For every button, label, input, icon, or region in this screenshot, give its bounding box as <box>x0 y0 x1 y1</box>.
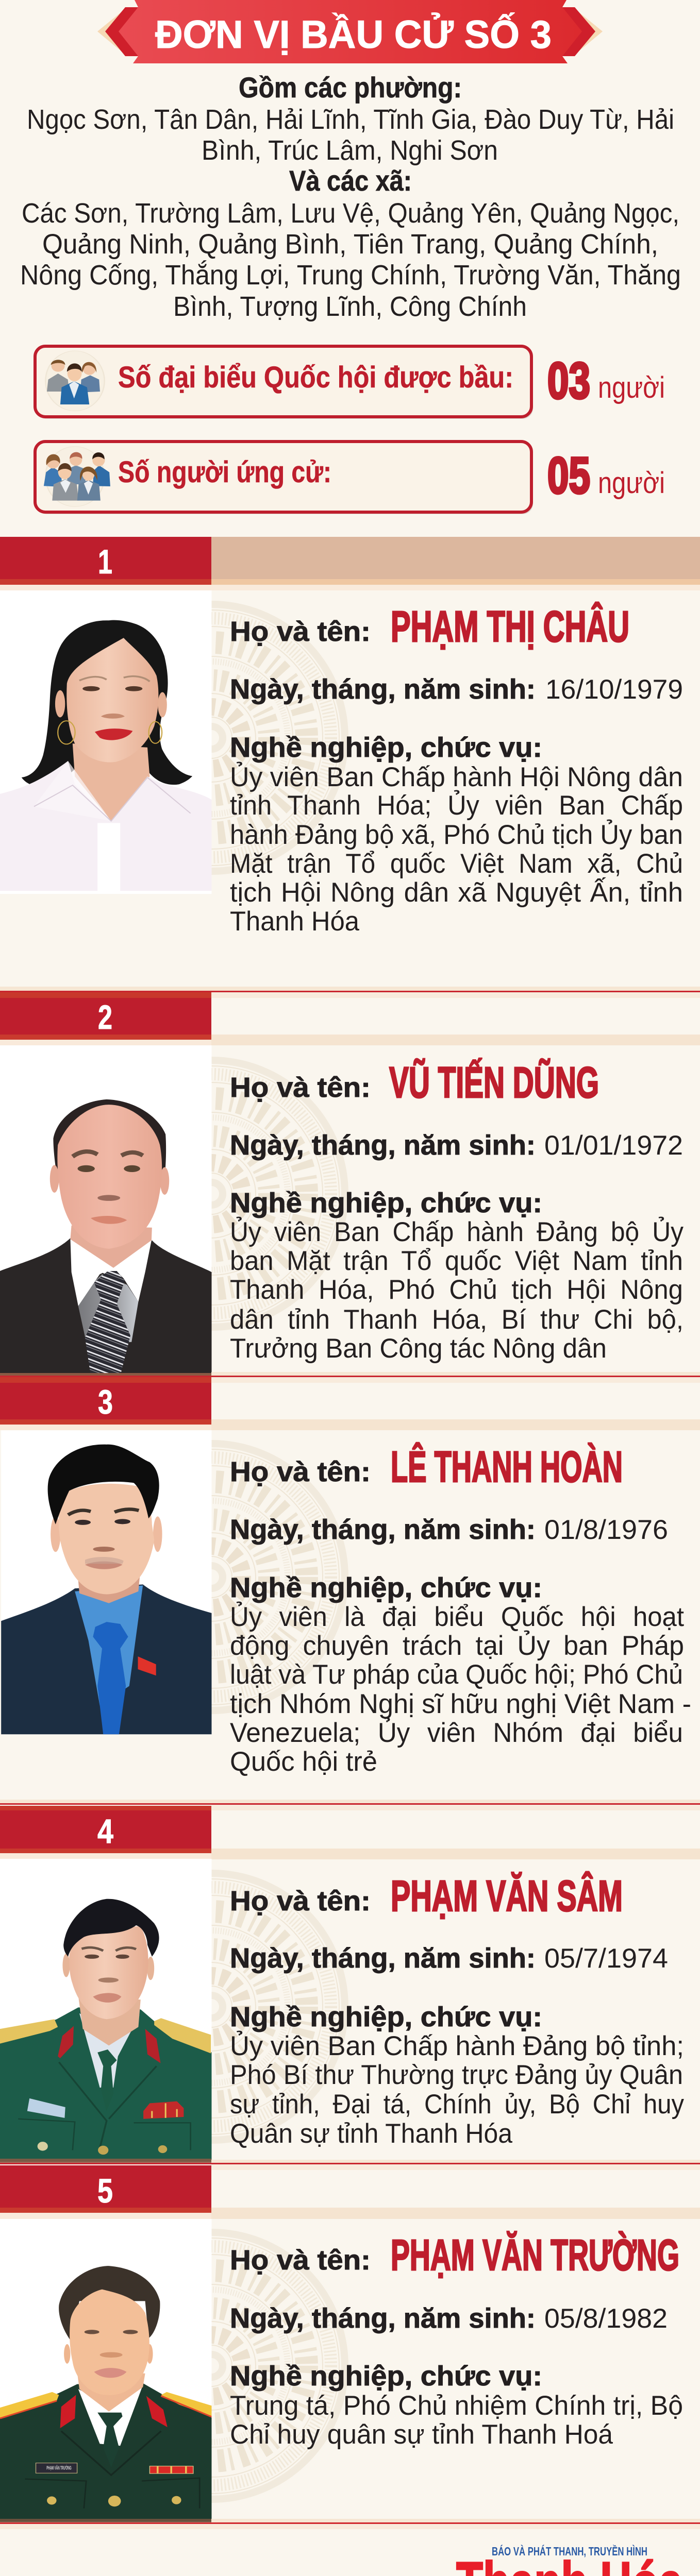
occupation: Phó Bí thư Thường trực Đảng ủy Quân <box>230 2060 683 2090</box>
birth date row: Ngày, tháng, năm sinh: <box>230 2303 536 2334</box>
occupation: Thanh Hóa, Phó Chủ tịch Hội Nông <box>230 1275 683 1305</box>
birth date row: Ngày, tháng, năm sinh: <box>230 1943 536 1974</box>
panel: candidate 4 <box>0 1800 700 2162</box>
occupation <box>230 2361 683 2450</box>
occupation: Venezuela; Ủy viên Nhóm đại biểu <box>230 1717 683 1748</box>
photo: Phạm Thị Châu <box>0 590 212 894</box>
occupation: Ủy viên Ban Chấp hành Hội Nông dân <box>230 761 683 792</box>
occupation: Nghề nghiệp, chức vụ: <box>230 1188 542 1218</box>
panel: candidate 1 <box>0 537 700 937</box>
logo: Thanh Hóa newspaper: BÁO VÀ PHÁT THANH, TRUYỀN HÌNH <box>492 2544 647 2558</box>
drum watermark <box>78 1444 345 1710</box>
birth date row <box>230 1943 668 1974</box>
intro: area list: Quảng Ninh, Quảng Bình, Tiên Trang, Quảng Chính, <box>42 229 658 260</box>
name row <box>230 1058 599 1107</box>
photo: Vũ Tiến Dũng <box>0 1045 212 1376</box>
occupation: Trưởng Ban Công tác Nông dân <box>230 1333 607 1364</box>
number header 2: 2 <box>98 998 112 1036</box>
stat box: candidates <box>35 442 665 514</box>
photo: Phạm Văn Sâm <box>0 1859 212 2162</box>
intro: area list: Bình, Tượng Lĩnh, Công Chính <box>173 291 527 322</box>
occupation: Nghề nghiệp, chức vụ: <box>230 732 542 763</box>
occupation: Ủy viên là đại biểu Quốc hội hoạt <box>230 1601 684 1632</box>
occupation <box>230 1572 691 1777</box>
occupation: tịch Nhóm Nghị sĩ hữu nghị Việt Nam - <box>230 1689 691 1719</box>
occupation: Nghề nghiệp, chức vụ: <box>230 1572 542 1603</box>
number header 5: 5 <box>97 2172 113 2210</box>
drum watermark <box>78 1060 345 1327</box>
stat label: Số đại biểu Quốc hội được bầu: <box>118 361 513 394</box>
stat unit: người <box>598 371 665 404</box>
number header 5 <box>0 2159 700 2219</box>
occupation: hành Đảng bộ xã, Phó Chủ tịch Ủy ban <box>230 819 683 850</box>
occupation: tịch Hội Nông dân xã Nguyệt Ấn, tỉnh <box>230 877 683 908</box>
photo: Phạm Văn Trường <box>0 2219 212 2522</box>
birth date row: Ngày, tháng, năm sinh: <box>230 1514 536 1545</box>
icon: five people <box>44 447 110 506</box>
occupation: Ủy viên Ban Chấp hành Đảng bộ Ủy <box>230 1216 684 1247</box>
stat unit: người <box>598 466 665 500</box>
name row: Họ và tên: <box>230 2245 371 2276</box>
panel: candidate 2 <box>0 987 700 1376</box>
occupation: Quốc hội trẻ <box>230 1747 377 1777</box>
intro: area list: Gồm các phường: <box>239 71 462 104</box>
number header 4: 4 <box>97 1812 113 1850</box>
number header 2 <box>0 987 700 1045</box>
icon: three people <box>45 351 105 411</box>
name row: Họ và tên: <box>230 616 371 647</box>
birth date row: 05/7/1974 <box>544 1943 668 1974</box>
title banner <box>97 0 603 63</box>
panel: candidate 5 <box>0 2159 700 2522</box>
birth date row: Ngày, tháng, năm sinh: <box>230 674 536 705</box>
birth date row <box>230 1130 683 1161</box>
stat label: Số người ứng cử: <box>118 455 331 489</box>
occupation <box>230 732 683 937</box>
stat value: 05 <box>547 447 590 504</box>
occupation <box>230 1188 684 1364</box>
number header 1 <box>0 537 700 590</box>
name row <box>230 1443 623 1491</box>
name row: Họ và tên: <box>230 1456 371 1487</box>
photo: Phạm Văn Trường: PHẠM VĂN TRƯỜNG <box>46 2465 72 2471</box>
occupation: Trung tá, Phó Chủ nhiệm Chính trị, Bộ <box>230 2391 683 2421</box>
number header 3: 3 <box>98 1383 113 1421</box>
drum watermark <box>78 2232 345 2499</box>
photo: Lê Thanh Hoàn <box>1 1430 212 1734</box>
occupation: ban Mặt trận Tổ quốc Việt Nam tỉnh <box>230 1246 683 1276</box>
name row: VŨ TIẾN DŨNG <box>389 1058 599 1107</box>
number header 1: 1 <box>98 543 112 581</box>
panel: candidate 3 <box>0 1372 700 1777</box>
birth date row <box>230 1514 668 1545</box>
occupation: Quân sự tỉnh Thanh Hóa <box>230 2119 512 2149</box>
occupation: luật và Tư pháp của Quốc hội; Phó Chủ <box>230 1659 683 1690</box>
occupation: Thanh Hóa <box>230 906 359 937</box>
name row: Họ và tên: <box>230 1072 371 1103</box>
birth date row: 01/01/1972 <box>544 1130 683 1161</box>
occupation: động chuyên trách tại Ủy ban Pháp <box>230 1630 684 1661</box>
name row <box>230 602 629 651</box>
birth date row: Ngày, tháng, năm sinh: <box>230 1130 536 1161</box>
name row <box>230 2231 679 2279</box>
birth date row <box>230 2303 668 2334</box>
intro: area list: Bình, Trúc Lâm, Nghi Sơn <box>202 135 498 166</box>
occupation: Nghề nghiệp, chức vụ: <box>230 2002 542 2032</box>
birth date row <box>230 674 683 705</box>
occupation <box>230 2002 684 2149</box>
stat value: 03 <box>547 352 590 409</box>
number header 3 <box>0 1372 700 1430</box>
birth date row: 16/10/1979 <box>545 674 683 705</box>
banner title: ĐƠN VỊ BẦU CỬ SỐ 3 <box>155 13 552 57</box>
drum watermark <box>78 1873 345 2140</box>
occupation: Chỉ huy quân sự tỉnh Thanh Hoá <box>230 2419 613 2450</box>
drum watermark <box>78 604 345 871</box>
occupation: Nghề nghiệp, chức vụ: <box>230 2361 542 2392</box>
name row <box>230 1872 623 1920</box>
intro: area list: Và các xã: <box>289 164 412 197</box>
intro: area list <box>20 71 681 322</box>
birth date row: 05/8/1982 <box>544 2303 668 2334</box>
occupation: Ủy viên Ban Chấp hành Đảng bộ tỉnh; <box>230 2030 684 2061</box>
number header 4 <box>0 1800 700 1859</box>
footer divider <box>0 2519 700 2529</box>
name row: Họ và tên: <box>230 1886 371 1917</box>
birth date row: 01/8/1976 <box>544 1515 668 1545</box>
occupation: tỉnh Thanh Hóa; Ủy viên Ban Chấp <box>230 790 683 821</box>
stat box: delegates elected <box>35 346 665 419</box>
occupation: dân tỉnh Thanh Hóa, Bí thư Chi bộ, <box>230 1304 684 1335</box>
